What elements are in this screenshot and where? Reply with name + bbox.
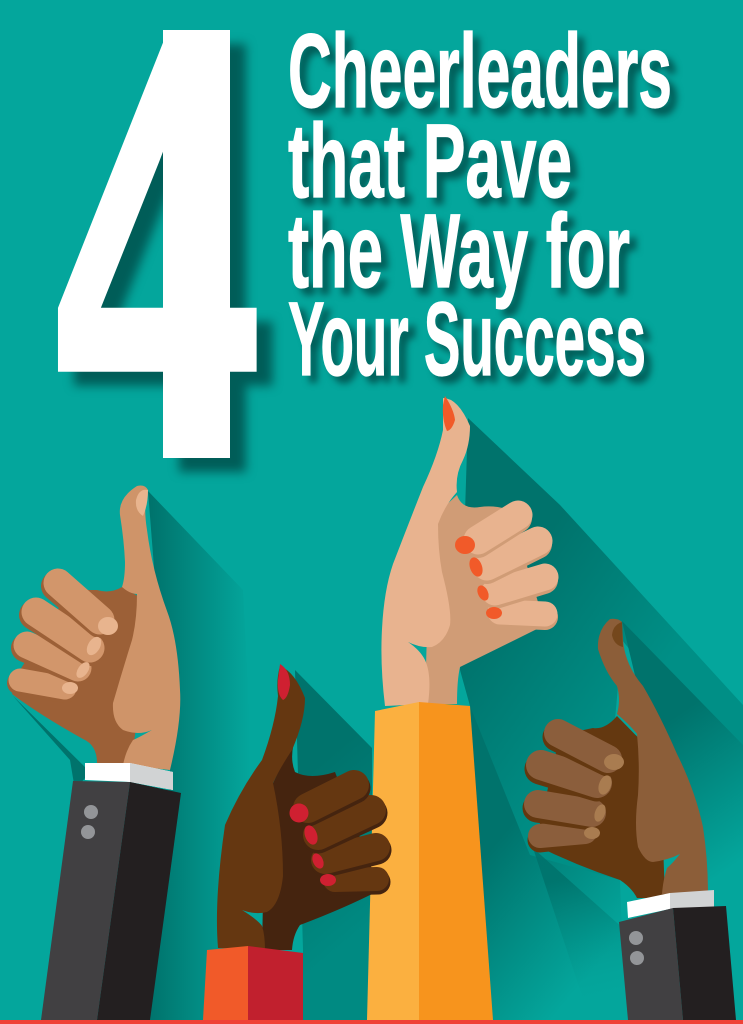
thumb nail xyxy=(443,396,455,431)
jacket sleeve xyxy=(41,781,130,1020)
hand 3: light hand with orange nails and yellow sleeve xyxy=(367,396,545,1020)
title xyxy=(288,13,672,398)
finger nails xyxy=(98,617,118,635)
palm shade xyxy=(425,495,545,704)
back of hand and thumb xyxy=(598,619,708,894)
sleeve buttons xyxy=(84,805,98,819)
shirt cuff xyxy=(85,763,173,790)
fingers xyxy=(537,733,608,840)
palm shade xyxy=(12,587,145,770)
title line: that Pave: that Pave xyxy=(288,103,572,220)
thumb nail xyxy=(136,490,148,516)
finger nails xyxy=(290,804,308,822)
bottom red stripe xyxy=(0,1020,743,1024)
back of hand and thumb xyxy=(217,666,305,950)
sleeve buttons xyxy=(629,931,643,945)
palm shade xyxy=(535,716,665,898)
back of hand and thumb xyxy=(113,486,180,770)
fingers xyxy=(19,583,100,691)
shirt cuff xyxy=(627,893,670,918)
hand 4: brown hand with dark suit sleeve xyxy=(535,619,736,1020)
finger nails xyxy=(455,536,475,554)
thumb nail xyxy=(278,664,290,700)
back of hand and thumb xyxy=(381,398,470,706)
fingers xyxy=(308,785,378,883)
hand 1: thumbs up with dark suit sleeve xyxy=(12,486,181,1020)
hand 2: dark hand with red nails and red sleeve xyxy=(203,664,380,1020)
big number 4 xyxy=(53,0,260,585)
sleeve xyxy=(367,702,419,1020)
long shadows behind hands xyxy=(13,418,743,1020)
sleeve xyxy=(203,946,248,1020)
thumb nail xyxy=(612,622,623,647)
jacket sleeve xyxy=(619,908,683,1020)
finger nails xyxy=(604,754,624,770)
palm shade xyxy=(262,730,380,950)
fingers xyxy=(478,515,545,617)
